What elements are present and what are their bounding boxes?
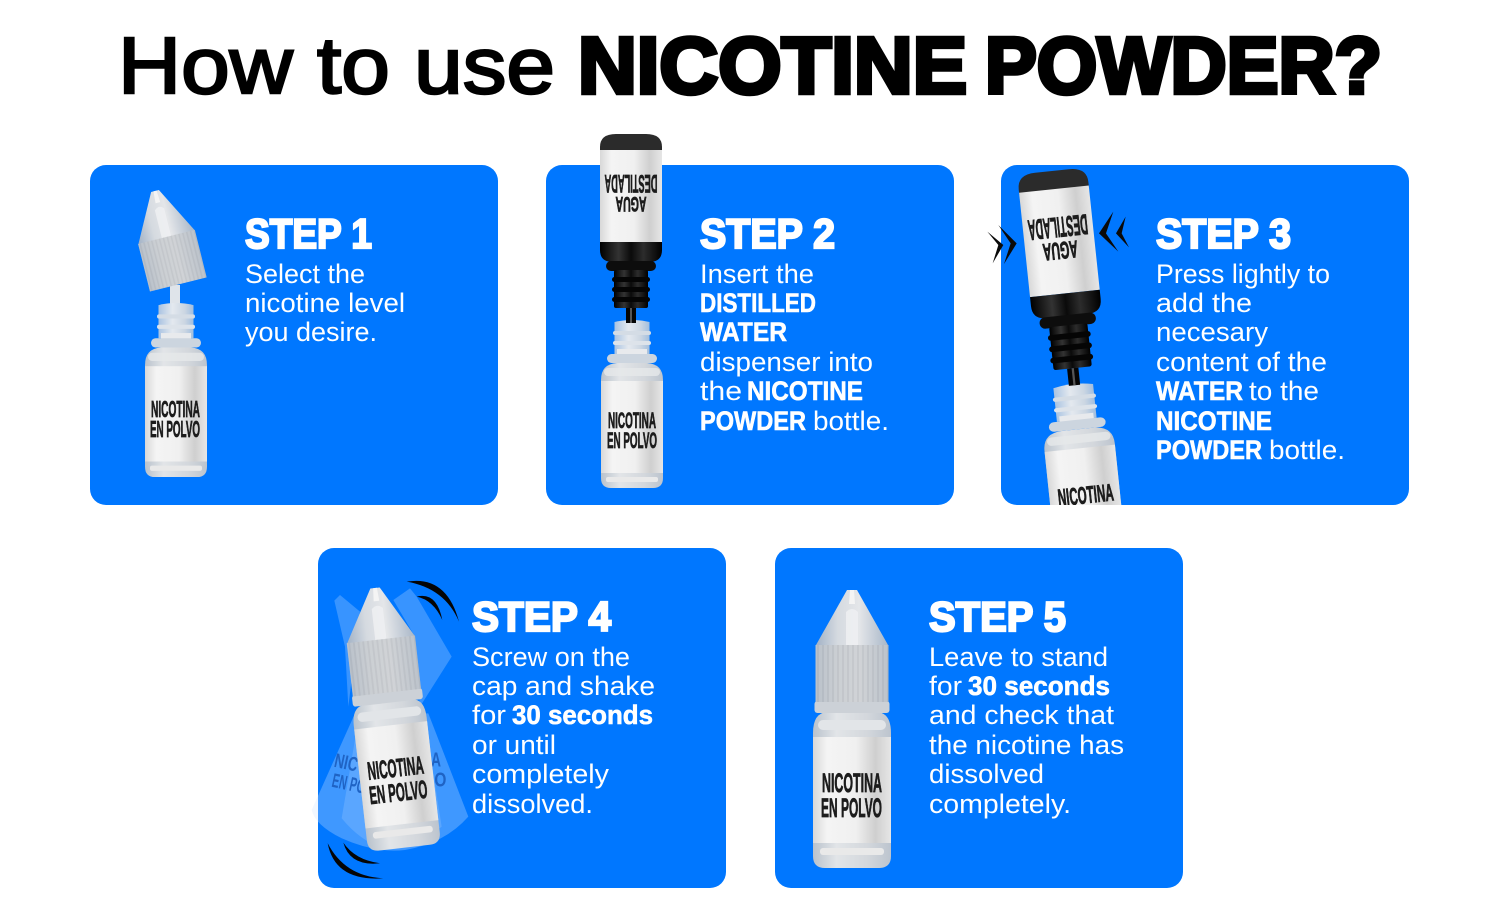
heading: step 5: STEP 5 [929, 593, 1066, 640]
icon: tilted nicotine bottle: NICOTINA [1056, 479, 1115, 512]
panel: step 3 [988, 165, 1409, 505]
text: step 3 instructions: Press lightly to [1156, 259, 1330, 289]
icon: nicotine bottle [601, 320, 663, 488]
icon: capped nicotine bottle: EN POLVO [821, 793, 882, 823]
text: step 5 instructions: 30 seconds [968, 671, 1110, 701]
text: step 4 instructions: completely [472, 759, 610, 789]
panel: step 1: EN POLVO [150, 416, 200, 442]
text: step 2 instructions [700, 259, 889, 436]
icon: shaking motion ghosts: A [431, 750, 441, 772]
panel: step 3: DESTILADA [1026, 207, 1089, 246]
heading: step 1: STEP 1 [245, 210, 372, 257]
title: NICOTINE [578, 21, 967, 110]
text: step 4 instructions: Screw on the [472, 642, 630, 672]
icon: nicotine bottle: NICOTINA [608, 408, 656, 433]
panel: step 2: EN POLVO [607, 428, 657, 453]
text: step 5 instructions: Leave to stand [929, 642, 1108, 672]
text: step 2 instructions: dispenser into [700, 347, 873, 377]
text: step 1 instructions: nicotine level [245, 288, 405, 318]
text: step 3 instructions: necesary [1156, 317, 1269, 347]
icon: open nicotine bottle with cap: NICOTINA [151, 396, 200, 422]
icon: tilted water dispenser [1017, 167, 1109, 389]
text: step 1 instructions: you desire. [245, 317, 377, 347]
text: step 5 instructions: the nicotine has [929, 730, 1124, 760]
icon: shaking motion ghosts: O [434, 770, 446, 792]
title: How to use [118, 21, 555, 110]
icon: capped bottle shaking: NICOTINA [366, 752, 425, 786]
text: step 4 instructions: dissolved. [472, 789, 593, 819]
heading: step 2: STEP 2 [700, 210, 835, 257]
text: step 2 instructions: POWDER [700, 406, 806, 436]
text: step 5 instructions: completely. [929, 789, 1071, 819]
icon: distilled water dispenser: AGUA [616, 192, 646, 215]
text: step 3 instructions: add the [1156, 288, 1252, 318]
icon: shaking motion ghosts: NIC [332, 750, 360, 776]
icon: press chevrons [987, 212, 1129, 264]
text: step 5 instructions: dissolved [929, 759, 1044, 789]
text: step 3 instructions: to the [1249, 376, 1319, 406]
icon: shaking motion ghosts [312, 588, 468, 851]
text: step 4 instructions [472, 642, 655, 819]
text: step 1 instructions: Select the [245, 259, 365, 289]
text: step 3 instructions: bottle. [1269, 435, 1345, 465]
text: step 2 instructions: DISTILLED [700, 288, 816, 318]
text: step 3 instructions: NICOTINE [1156, 406, 1272, 436]
icon: distilled water dispenser [600, 134, 662, 323]
text: step 5 instructions [929, 642, 1124, 819]
panel: step 1 [90, 165, 498, 505]
title [118, 21, 1382, 110]
text: step 2 instructions: NICOTINE [747, 376, 863, 406]
text: step 3 instructions: POWDER [1156, 435, 1262, 465]
icon: open nicotine bottle with cap [127, 184, 207, 477]
text: step 3 instructions: content of the [1156, 347, 1327, 377]
icon: shake motion arcs [328, 581, 459, 879]
icon: capped nicotine bottle [813, 590, 891, 868]
text: step 2 instructions: bottle. [813, 406, 889, 436]
heading: step 3: STEP 3 [1156, 210, 1291, 257]
text: step 1 instructions [245, 259, 405, 347]
text: step 2 instructions: Insert the [700, 259, 814, 289]
panel: step 2: DESTILADA [604, 169, 658, 197]
text: step 4 instructions: for [472, 700, 506, 730]
text: step 2 instructions: the [700, 376, 742, 406]
icon: capped nicotine bottle: NICOTINA [822, 768, 882, 798]
icon: tilted water dispenser: AGUA [1041, 235, 1079, 265]
text: step 3 instructions [1156, 259, 1345, 465]
panel: step 4 [312, 548, 726, 888]
text: step 4 instructions: 30 seconds [512, 700, 653, 730]
text: step 3 instructions: WATER [1156, 376, 1243, 406]
text: step 5 instructions: for [929, 671, 962, 701]
panel: step 5 [775, 548, 1183, 888]
panel: step 2 [546, 134, 954, 505]
text: step 2 instructions: WATER [700, 317, 787, 347]
icon: shaking motion ghosts: EN PO [330, 770, 367, 798]
icon: tilted nicotine bottle [1044, 384, 1122, 505]
icon: capped bottle shaking: EN POLVO [368, 776, 429, 810]
icon: capped bottle shaking [339, 584, 441, 852]
text: step 4 instructions: cap and shake [472, 671, 655, 701]
heading: step 4: STEP 4 [472, 593, 612, 640]
text: step 4 instructions: or until [472, 730, 556, 760]
text: step 5 instructions: and check that [929, 700, 1115, 730]
title: POWDER? [985, 21, 1382, 110]
